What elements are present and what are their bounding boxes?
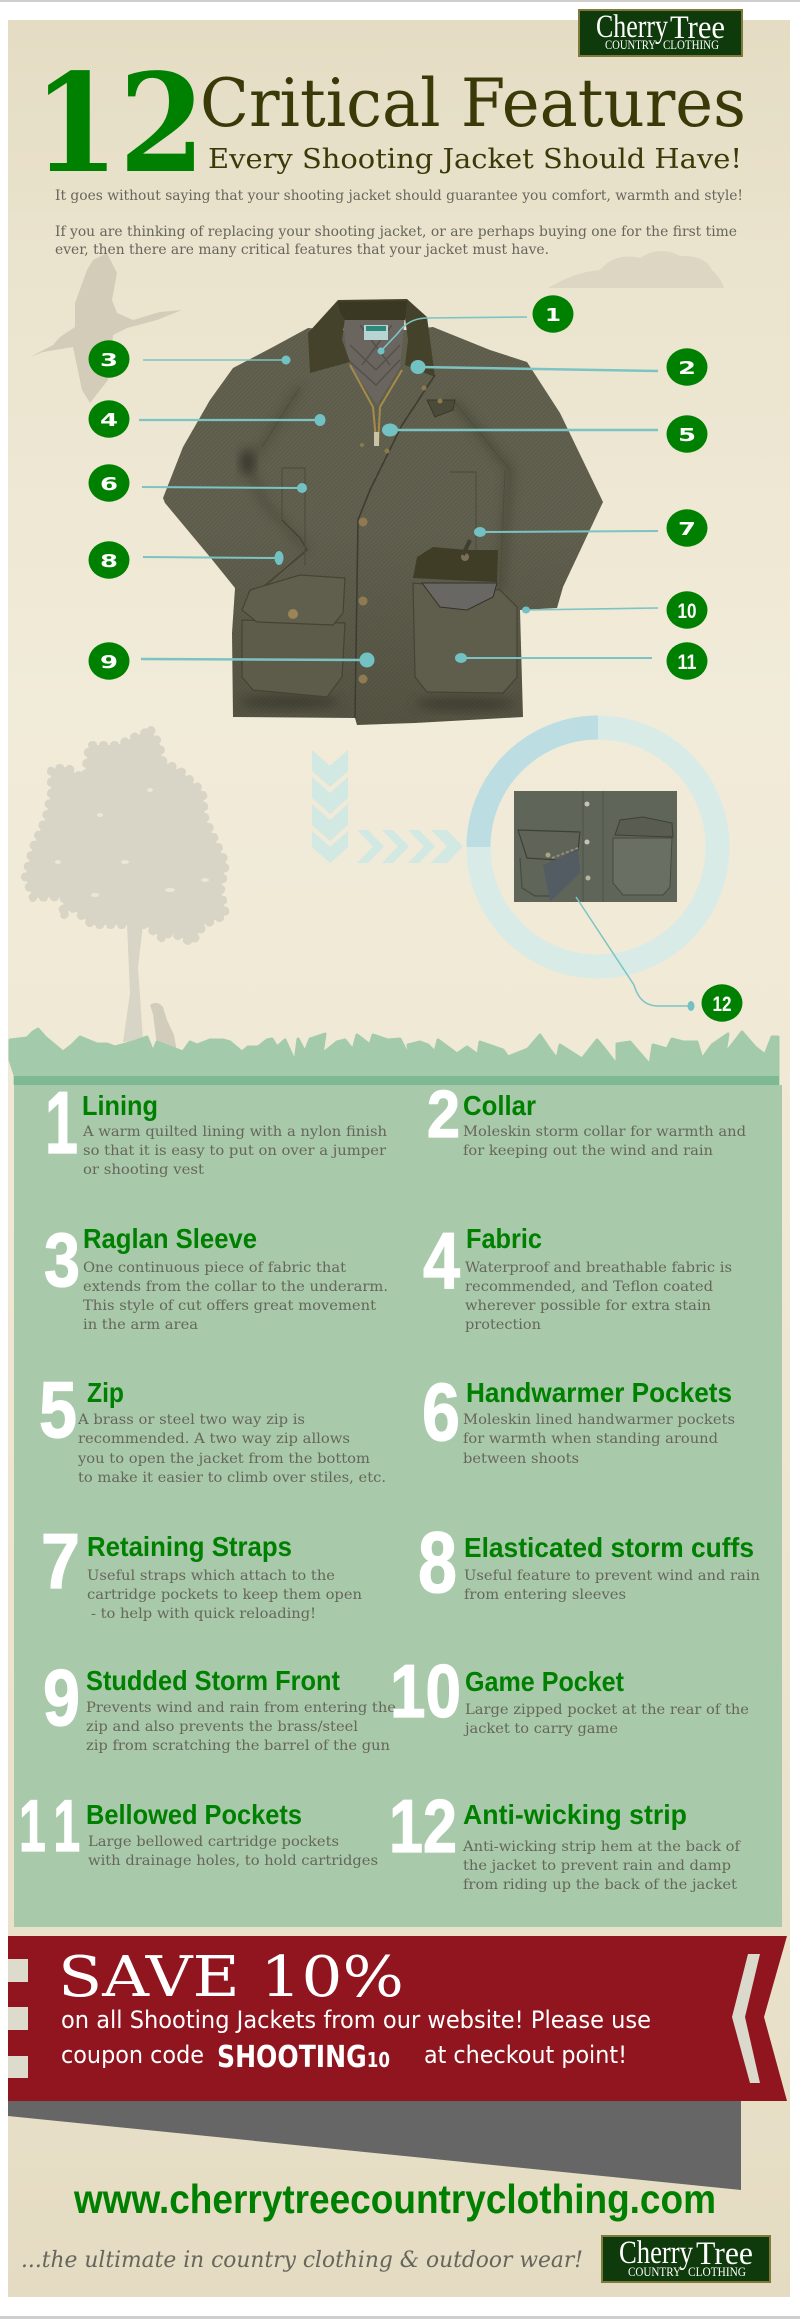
- number badges: 8: [100, 551, 118, 572]
- ring around detail photo: [478, 728, 718, 966]
- tagline: ...the ultimate in country clothing & outdoor wear!: [21, 2248, 583, 2273]
- feature 8: from entering sleeves: [464, 1587, 626, 1603]
- feature 9: [43, 1653, 396, 1754]
- feature 9: Studded Storm Front: [86, 1665, 340, 1696]
- feature 3: One continuous piece of fabric that: [83, 1260, 346, 1276]
- number badges: 7: [678, 519, 696, 540]
- number badges: 10: [678, 600, 696, 623]
- number badges: 9: [100, 652, 118, 673]
- red offer banner: SHOOTING10: [217, 2040, 390, 2075]
- feature 12: the jacket to prevent rain and damp: [463, 1858, 731, 1874]
- feature 1: or shooting vest: [83, 1162, 204, 1178]
- feature 11: with drainage holes, to hold cartridges: [88, 1853, 378, 1869]
- feature 4: wherever possible for extra stain: [465, 1298, 711, 1314]
- logo: top: Tree: [670, 10, 725, 46]
- right pocket: [413, 583, 517, 693]
- detail photo: anti-wicking strip: [514, 791, 677, 902]
- title: 12: [33, 44, 205, 204]
- number badges: 6: [100, 474, 118, 495]
- studs: [358, 518, 368, 526]
- logo: top: CLOTHING: [663, 38, 719, 52]
- feature 3: Raglan Sleeve: [83, 1223, 257, 1254]
- background bush silhouette: [548, 251, 724, 288]
- feature 4: 4: [423, 1216, 460, 1305]
- background bird silhouette: [30, 253, 182, 403]
- intro text: It goes without saying that your shooting jacket should guarantee you comfort, warmth and style!: [55, 188, 743, 204]
- feature 8: [418, 1515, 760, 1611]
- feature 5: Zip: [87, 1377, 124, 1408]
- red offer banner: on all Shooting Jackets from our website! Please use: [61, 2006, 651, 2034]
- number badges: 3: [100, 350, 118, 371]
- feature 2: [427, 1077, 746, 1159]
- red offer banner: coupon code: [61, 2041, 204, 2069]
- feature 7: Useful straps which attach to the: [87, 1568, 335, 1584]
- feature 6: for warmth when standing around: [463, 1431, 718, 1447]
- feature 8: 8: [418, 1515, 457, 1611]
- left pocket: [242, 620, 345, 697]
- feature 9: zip from scratching the barrel of the gun: [86, 1738, 390, 1754]
- feature 12: from riding up the back of the jacket: [463, 1877, 737, 1893]
- feature 1: [45, 1073, 387, 1178]
- feature 5: you to open the jacket from the bottom: [77, 1451, 370, 1467]
- zip: [350, 365, 402, 445]
- red offer banner: [8, 1936, 787, 2101]
- feature 4: Fabric: [466, 1223, 542, 1254]
- red offer banner: at checkout point!: [424, 2041, 627, 2069]
- feature 6: Handwarmer Pockets: [466, 1377, 732, 1408]
- feature 12: Anti-wicking strip hem at the back of: [462, 1839, 742, 1855]
- feature 10: Large zipped pocket at the rear of the: [465, 1702, 749, 1718]
- feature 7: [41, 1517, 362, 1622]
- number badges: 12: [712, 993, 732, 1016]
- feature 2: for keeping out the wind and rain: [463, 1143, 713, 1159]
- neck lining: [342, 315, 405, 405]
- leader line 12: [576, 897, 694, 1011]
- feature 2: Moleskin storm collar for warmth and: [463, 1124, 746, 1140]
- feature 5: to make it easier to climb over stiles, etc.: [78, 1470, 386, 1486]
- feature 12: Anti-wicking strip: [463, 1799, 687, 1830]
- background tree silhouette: [25, 730, 226, 1052]
- logo: bottom: COUNTRY: [628, 2265, 681, 2279]
- feature 2: 2: [427, 1077, 460, 1152]
- feature 6: 6: [422, 1367, 460, 1458]
- left sleeve cuff: [248, 520, 307, 600]
- intro text: If you are thinking of replacing your shooting jacket, or are perhaps buying one for the first time: [55, 224, 737, 240]
- grass: [10, 1029, 778, 1084]
- logo: bottom: Tree: [696, 2236, 753, 2272]
- feature 10: jacket to carry game: [463, 1721, 618, 1737]
- storm flap: [355, 375, 435, 718]
- feature 1: so that it is easy to put on over a jumper: [83, 1143, 386, 1159]
- feature 10: Game Pocket: [465, 1666, 624, 1697]
- feature 7: Retaining Straps: [87, 1531, 292, 1562]
- feature 11: [19, 1786, 378, 1869]
- feature 12: [389, 1784, 742, 1893]
- collar: [308, 299, 435, 377]
- feature 6: Moleskin lined handwarmer pockets: [463, 1412, 735, 1428]
- right chevrons: [357, 830, 463, 863]
- feature 4: [423, 1216, 732, 1333]
- feature 6: between shoots: [463, 1451, 579, 1467]
- feature 11: Large bellowed cartridge pockets: [88, 1834, 339, 1850]
- dog silhouette: [150, 1003, 177, 1052]
- feature 12: 12: [389, 1784, 457, 1868]
- feature 11: 11: [19, 1786, 90, 1868]
- intro text: [55, 188, 743, 258]
- number badges: 1: [545, 305, 561, 326]
- title: [33, 44, 746, 204]
- feature 9: 9: [43, 1653, 80, 1742]
- number badges: [88, 295, 742, 1022]
- moleskin pocket flap: [413, 547, 498, 582]
- banner shadow: [8, 2101, 741, 2190]
- feature 5: [39, 1365, 386, 1486]
- red offer banner: SAVE 10%: [58, 1945, 404, 2010]
- feature 4: recommended, and Teflon coated: [465, 1279, 713, 1295]
- feature 5: A brass or steel two way zip is: [77, 1412, 305, 1428]
- down chevrons: [312, 750, 348, 863]
- feature 1: A warm quilted lining with a nylon finish: [82, 1124, 387, 1140]
- feature 3: [44, 1218, 388, 1333]
- number badges: 5: [678, 425, 696, 446]
- number badges: 4: [100, 410, 118, 431]
- title: Every Shooting Jacket Should Have!: [208, 144, 742, 175]
- leader lines and dots: [139, 317, 658, 668]
- number badges: 2: [678, 358, 696, 379]
- logo: top: [579, 9, 742, 56]
- feature 5: recommended. A two way zip allows: [78, 1431, 350, 1447]
- feature 3: extends from the collar to the underarm.: [83, 1279, 388, 1295]
- title: Critical Features: [200, 65, 746, 142]
- feature 10: [390, 1649, 749, 1737]
- logo: bottom: Cherry: [619, 2235, 693, 2271]
- feature 9: zip and also prevents the brass/steel: [86, 1719, 359, 1735]
- logo: top: Cherry: [596, 9, 668, 45]
- logo: bottom: CLOTHING: [688, 2265, 746, 2279]
- feature 9: Prevents wind and rain from entering the: [86, 1700, 396, 1716]
- number badges: 11: [678, 651, 697, 674]
- feature 8: Useful feature to prevent wind and rain: [464, 1568, 760, 1584]
- feature 5: 5: [39, 1365, 77, 1454]
- feature 4: Waterproof and breathable fabric is: [465, 1260, 732, 1276]
- feature 2: Collar: [463, 1090, 536, 1121]
- feature 4: protection: [465, 1317, 541, 1333]
- logo: bottom: [602, 2235, 770, 2282]
- feature 10: 10: [390, 1649, 461, 1733]
- feature 8: Elasticated storm cuffs: [464, 1532, 754, 1563]
- feature 3: This style of cut offers great movement: [83, 1298, 376, 1314]
- handwarmer pocket welts: [282, 468, 476, 565]
- feature 7: - to help with quick reloading!: [91, 1606, 316, 1622]
- intro text: ever, then there are many critical features that your jacket must have.: [55, 242, 549, 258]
- panel: features: [10, 1029, 782, 1927]
- feature 7: cartridge pockets to keep them open: [87, 1587, 362, 1603]
- feature 3: 3: [44, 1218, 80, 1303]
- feature 1: 1: [45, 1073, 78, 1172]
- feature 3: in the arm area: [83, 1317, 198, 1333]
- feature 11: Bellowed Pockets: [86, 1799, 302, 1830]
- jacket photo: [150, 290, 620, 730]
- feature 6: [422, 1367, 735, 1467]
- logo: top: COUNTRY: [605, 38, 656, 52]
- website url: www.cherrytreecountryclothing.com: [73, 2176, 716, 2222]
- feature 1: Lining: [82, 1090, 158, 1121]
- feature 7: 7: [41, 1517, 80, 1605]
